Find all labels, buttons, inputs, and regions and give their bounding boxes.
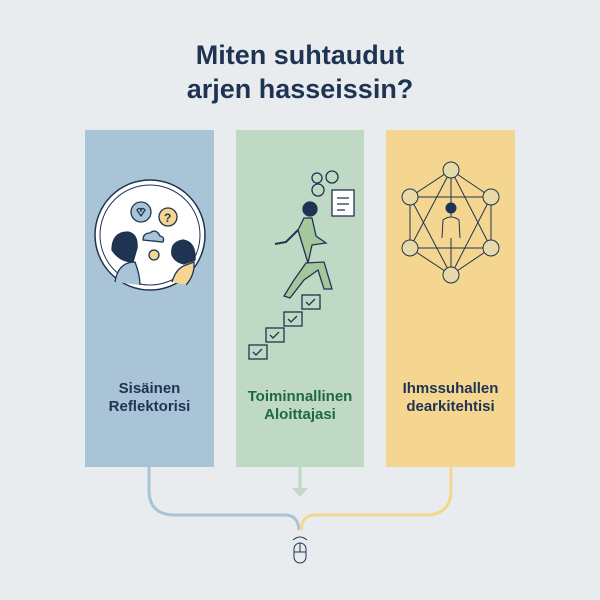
label: blue xyxy=(109,380,190,415)
icon: network xyxy=(402,162,499,283)
title xyxy=(187,40,413,104)
icon: runner on steps xyxy=(249,171,354,359)
title: arjen hasseissin? xyxy=(187,74,413,104)
arrow: green xyxy=(292,467,308,497)
panel: blue xyxy=(85,130,214,467)
label: green: Toiminnallinen xyxy=(248,388,352,405)
title: Miten suhtaudut xyxy=(196,40,404,70)
label: blue: Reflektorisi xyxy=(109,398,190,415)
label: green xyxy=(248,388,352,423)
icon: mouse xyxy=(293,537,307,563)
connector: yellow xyxy=(301,467,451,530)
label: blue: Sisäinen xyxy=(119,380,180,397)
panel: yellow xyxy=(386,130,515,467)
connector: blue xyxy=(149,467,299,530)
label: yellow xyxy=(403,380,498,415)
label: green: Aloittajasi xyxy=(264,406,336,423)
label: yellow: Ihmssuhallen xyxy=(403,380,498,397)
label: yellow: dearkitehtisi xyxy=(406,398,495,415)
panel: green xyxy=(236,130,364,467)
icon: two people circle xyxy=(95,180,205,290)
icon: two people circle: ? xyxy=(164,211,171,225)
